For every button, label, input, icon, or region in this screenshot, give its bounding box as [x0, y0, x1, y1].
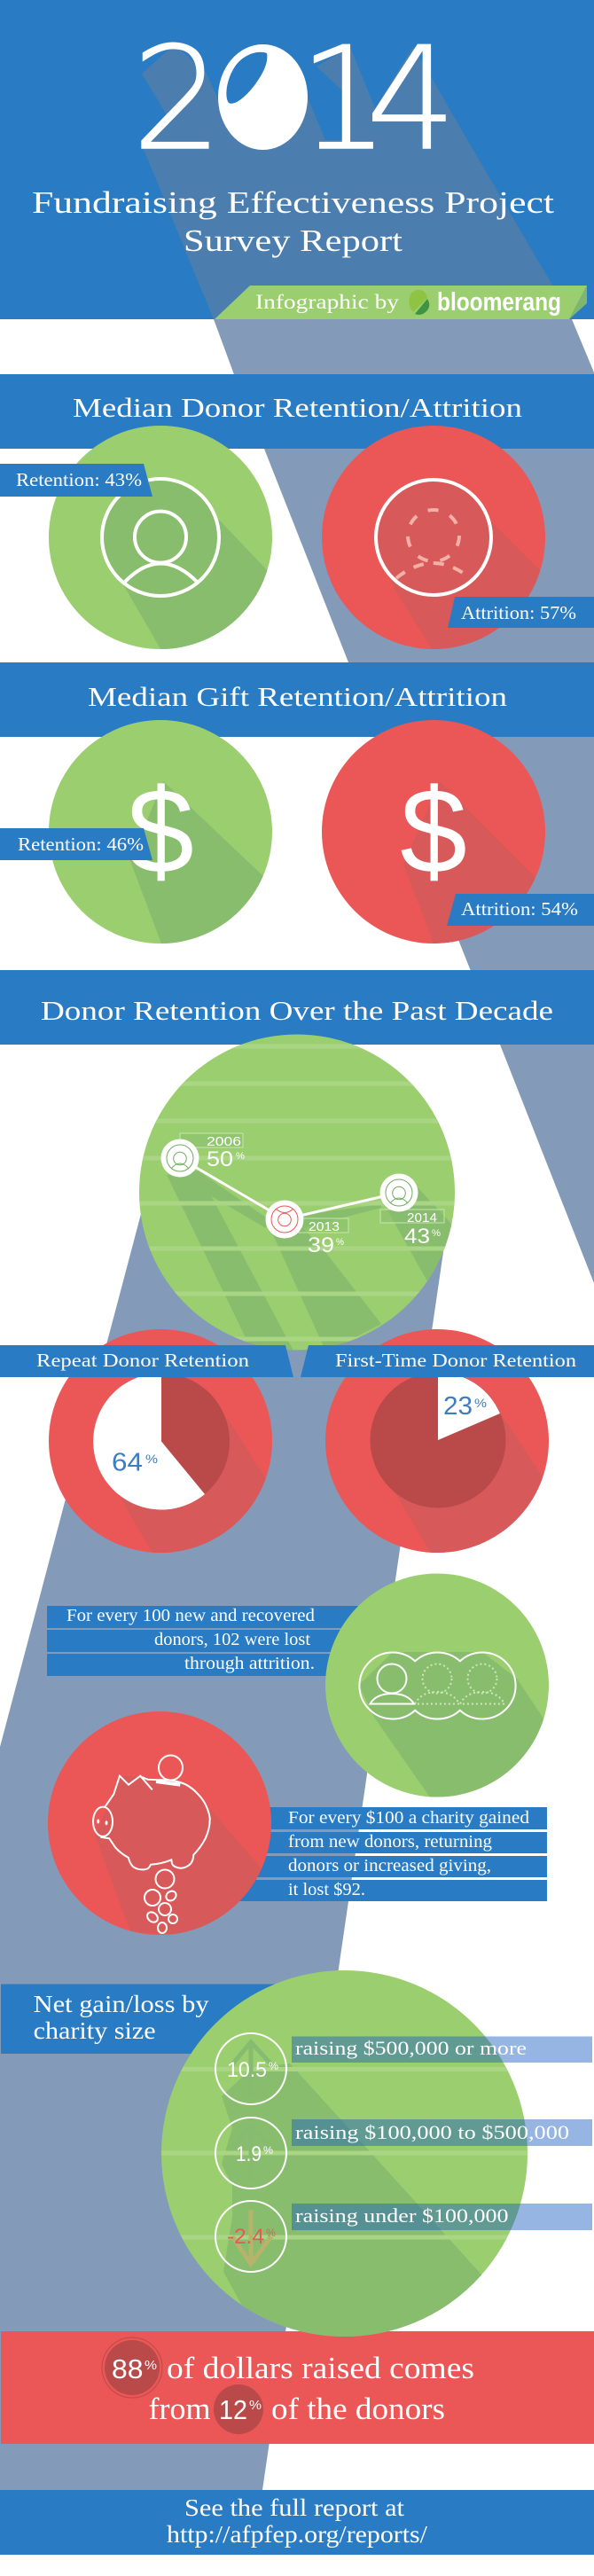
- title: 2014: 2: [132, 16, 223, 182]
- icon: dollar sign: $: [400, 763, 467, 898]
- red band: 88% of dollars from 12% of donors: of dollars raised comes: [167, 2351, 474, 2385]
- icon: dollar sign: $: [127, 763, 194, 898]
- icon: one donor kept, two dotted donors lost: [359, 1652, 516, 1719]
- subtitle line two: Survey Report: [184, 223, 403, 258]
- label: retention 46%: [0, 828, 152, 860]
- text block: $100 gained, $92 lost: For every $100 a charity gained: [288, 1808, 529, 1828]
- stat: +10.5%: [215, 2033, 286, 2104]
- title: 2014: 1: [299, 16, 389, 182]
- header long shadow: [142, 44, 572, 319]
- text block: 100 new donors, 102 lost: through attrition.: [184, 1654, 315, 1673]
- icon: piggy bank with falling coins: [93, 1756, 210, 1933]
- red band: 88% of dollars from 12% of donors: from: [149, 2392, 211, 2426]
- label: attrition 57%: [448, 597, 594, 628]
- label: attrition 54%: [447, 894, 594, 926]
- line chart circle: [133, 1034, 461, 1352]
- panel: donor retention green circle: [49, 426, 275, 652]
- data point 2006: 50: [207, 1147, 233, 1171]
- pie chart: repeat donor retention 64%: [49, 1329, 284, 1561]
- badge: 88%: 88: [112, 2353, 144, 2384]
- text block: $100 gained, $92 lost: from new donors, returning: [288, 1832, 492, 1852]
- label: raising under $100,000: raising under $100,000: [295, 2204, 509, 2227]
- ribbon: infographic by bloomerang: bloomerang: [437, 288, 561, 317]
- label: attrition 54%: Attrition: 54%: [461, 898, 578, 920]
- data point 2014: [379, 1174, 444, 1249]
- data point 2014: 43: [404, 1225, 430, 1249]
- badge: 88%: %: [145, 2358, 157, 2373]
- icon: person: [102, 479, 219, 596]
- ribbon: infographic by bloomerang: [215, 286, 587, 319]
- label: raising $500,000 or more: [292, 2036, 592, 2063]
- data point 2013: [266, 1201, 348, 1257]
- text block: 100 new donors, 102 lost: [47, 1606, 366, 1676]
- icon: bloomerang leaf: [410, 290, 429, 315]
- panel: gift attrition red circle: [322, 720, 550, 949]
- badge: 12%: [214, 2384, 263, 2434]
- trend line: [180, 1158, 399, 1219]
- data point 2014: 2014: [407, 1210, 437, 1225]
- data point 2014: %: [432, 1228, 441, 1239]
- pie chart: first-time donor retention 23%: %: [474, 1396, 487, 1410]
- stat: -2.4%: [215, 2201, 286, 2272]
- header panel: [0, 0, 594, 319]
- label: raising $100,000 to $500,000: raising $100,000 to $500,000: [295, 2121, 569, 2143]
- label: retention 43%: [0, 464, 152, 497]
- data point 2013: 2013: [309, 1219, 340, 1234]
- stat: +1.9%: %: [263, 2144, 273, 2157]
- pie chart: repeat donor retention 64%: 64: [112, 1449, 143, 1477]
- stat: -2.4%: -2.4: [227, 2225, 264, 2249]
- label band: first-time donor retention: First-Time Donor Retention: [335, 1350, 577, 1371]
- subtitle: Fundraising Effectiveness Project: [32, 185, 554, 220]
- pie chart: repeat donor retention 64%: %: [145, 1452, 158, 1466]
- heading block: net gain/loss by charity size: charity size: [34, 2017, 156, 2044]
- stat: +10.5%: 10.5: [227, 2058, 267, 2082]
- title: 2014: 4: [366, 16, 457, 182]
- badge: 12%: 12: [219, 2394, 247, 2425]
- heading band: median gift retention: [0, 662, 594, 737]
- title: 2014: 0: [226, 27, 305, 172]
- label: attrition 57%: Attrition: 57%: [461, 602, 576, 623]
- pie chart: first-time donor retention 23%: [325, 1329, 559, 1561]
- red band: 88% of dollars from 12% of donors: [1, 2331, 594, 2444]
- footer band: link to full report: [0, 2490, 594, 2555]
- heading band: donor retention over the past decade: Donor Retention Over the Past Decade: [41, 995, 553, 1026]
- text block: $100 gained, $92 lost: it lost $92.: [288, 1880, 365, 1899]
- label band: first-time donor retention: [301, 1345, 594, 1377]
- label: retention 43%: Retention: 43%: [16, 469, 142, 490]
- panel: piggy bank red circle: [48, 1711, 275, 1942]
- heading band: median donor retention: [0, 374, 594, 449]
- text block: 100 new donors, 102 lost: donors, 102 were lost: [154, 1630, 310, 1649]
- label: raising $500,000 or more: raising $500,000 or more: [295, 2037, 527, 2059]
- data point 2006: 2006: [207, 1134, 241, 1149]
- label band: repeat donor retention: Repeat Donor Retention: [36, 1350, 250, 1371]
- heading band: median gift retention: Median Gift Retention/Attrition: [88, 681, 508, 712]
- text block: $100 gained, $92 lost: donors or increased giving,: [288, 1856, 491, 1875]
- footer band: link to full report: http://afpfep.org/reports/: [167, 2521, 428, 2548]
- ribbon: infographic by bloomerang: Infographic by: [255, 291, 400, 313]
- heading block: net gain/loss by charity size: [1, 1985, 356, 2054]
- stat: +1.9%: [215, 2118, 286, 2188]
- stat: +10.5%: %: [269, 2060, 278, 2072]
- badge: 88%: [102, 2337, 162, 2398]
- heading band: donor retention over the past decade: [0, 970, 594, 1045]
- red band: 88% of dollars from 12% of donors: of the donors: [271, 2392, 445, 2426]
- panel: three donors green circle: [325, 1573, 554, 1800]
- panel: net gain/loss green circle: [160, 1970, 532, 2350]
- icon: missing person: [376, 480, 491, 595]
- label: raising $100,000 to $500,000: [292, 2119, 592, 2146]
- badge: 12%: %: [249, 2398, 262, 2413]
- pie chart: first-time donor retention 23%: 23: [443, 1392, 473, 1421]
- panel: donor attrition red circle: [322, 426, 550, 652]
- title: 2014: [132, 16, 457, 182]
- heading band: median donor retention: Median Donor Retention/Attrition: [73, 392, 523, 423]
- data point 2006: [161, 1133, 245, 1178]
- heading block: net gain/loss by charity size: Net gain/loss by: [34, 1991, 209, 2017]
- text block: 100 new donors, 102 lost: For every 100 new and recovered: [66, 1606, 315, 1625]
- stat: +1.9%: 1.9: [236, 2142, 262, 2166]
- text block: $100 gained, $92 lost: [239, 1807, 547, 1901]
- label band: repeat donor retention: [0, 1345, 293, 1377]
- label: raising under $100,000: [292, 2204, 592, 2230]
- data point 2013: 39: [308, 1233, 334, 1257]
- panel: gift retention green circle: [49, 720, 277, 949]
- footer band: link to full report: See the full report at: [184, 2494, 405, 2521]
- data point 2013: %: [336, 1237, 344, 1248]
- stat: -2.4%: %: [266, 2227, 276, 2239]
- label: retention 46%: Retention: 46%: [18, 834, 144, 855]
- data point 2006: %: [236, 1151, 245, 1162]
